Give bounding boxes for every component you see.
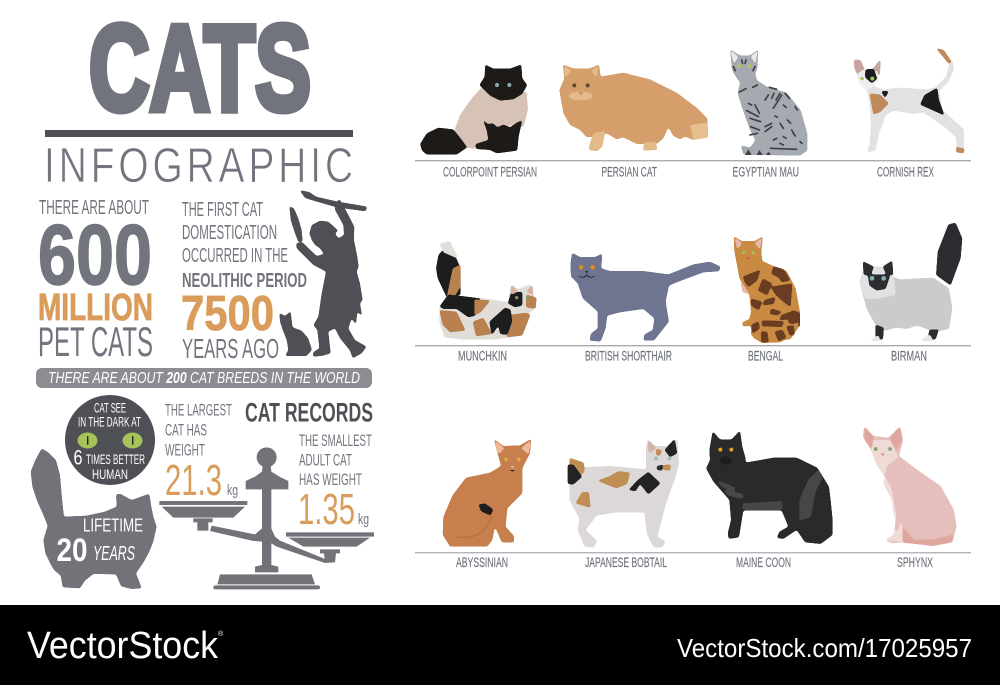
breed: british shorthair [570, 253, 721, 342]
text: row 1 labels: PERSIAN CAT [602, 164, 657, 180]
stat: first domestication: DOMESTICATION [182, 222, 277, 244]
text: row 3 labels: ABYSSINIAN [456, 555, 508, 570]
text: smallest cat: THE SMALLEST [299, 431, 372, 450]
footer bar [0, 605, 1000, 685]
text: row 1 labels: COLORPOINT PERSIAN [443, 164, 537, 180]
text: row 2 labels: BRITISH SHORTHAIR [585, 348, 672, 364]
text: smallest cat: ADULT CAT [299, 450, 352, 470]
breed: birman [859, 223, 962, 341]
text: row 2 labels: BENGAL [748, 348, 783, 364]
text: smallest cat: HAS WEIGHT [299, 470, 362, 489]
text: row 3 labels [456, 555, 933, 570]
breed: sphynx [863, 426, 957, 546]
heading: cat records: CAT RECORDS [245, 398, 373, 428]
stat: first domestication [181, 199, 307, 364]
icon: cat silhouette with lifetime [31, 448, 157, 589]
panel: breed row 2 [415, 223, 971, 346]
text: largest cat: kg [227, 482, 238, 499]
text: row 3 labels: MAINE COON [736, 555, 791, 570]
text: row 2 labels: BIRMAN [891, 348, 927, 364]
icon: caveman with small cat [279, 190, 367, 358]
text: largest cat: THE LARGEST [165, 400, 232, 420]
text: largest cat: WEIGHT [165, 440, 205, 460]
breed: cornish rex [854, 48, 965, 153]
breed: abyssinian [443, 439, 531, 547]
icon: cat silhouette with lifetime: YEARS [93, 543, 135, 565]
stat: 600 million pet cats [38, 197, 153, 365]
text: smallest cat: kg [358, 511, 369, 528]
icon: balance scale [159, 447, 374, 589]
text: smallest cat: 1.35 [298, 485, 355, 534]
stat: first domestication: THE FIRST CAT [182, 199, 263, 221]
panel: breed row 1 [415, 48, 971, 161]
stat: first domestication: NEOLITHIC PERIOD [182, 270, 307, 292]
subtitle: INFOGRAPHIC [44, 139, 357, 193]
text: row 2 labels [458, 348, 927, 364]
stat: 600 million pet cats: PET CATS [38, 318, 153, 365]
callout: cat night vision: TIMES BETTER [86, 452, 145, 467]
breed: munchkin [436, 241, 537, 340]
callout: cat night vision [65, 395, 155, 485]
text: smallest cat [298, 431, 372, 534]
breed: maine coon [706, 430, 833, 544]
text: row 1 labels [443, 164, 934, 180]
breed: colorpoint persian [420, 64, 528, 155]
stat: 600 million pet cats: 600 [38, 208, 152, 303]
callout: cat night vision: 6 [74, 446, 82, 470]
text: row 1 labels: CORNISH REX [877, 164, 934, 180]
text: largest cat [165, 400, 238, 505]
stat: first domestication: 7500 [181, 287, 274, 341]
footer bar: VectorStock.com/17025957 [677, 633, 972, 663]
breed: egyptian mau [730, 49, 807, 156]
text: row 1 labels: EGYPTIAN MAU [732, 164, 799, 180]
callout: cat night vision: HUMAN [92, 467, 128, 482]
callout: cat night vision: IN THE DARK AT [78, 414, 141, 430]
breed: persian cat [559, 64, 708, 151]
text: largest cat: CAT HAS [165, 420, 207, 440]
breed: japanese bobtail [568, 439, 679, 547]
text: row 3 labels: JAPANESE BOBTAIL [585, 555, 667, 570]
callout: cat night vision: CAT SEE [94, 400, 126, 416]
breed: bengal [734, 236, 800, 343]
text: largest cat: 21.3 [165, 456, 222, 505]
footer bar: VectorStock [27, 625, 219, 667]
icon: cat silhouette with lifetime: 20 [56, 532, 88, 568]
stat: first domestication: YEARS AGO [182, 333, 279, 364]
title: CATS [89, 0, 311, 136]
stat: first domestication: OCCURRED IN THE [182, 245, 288, 267]
stat: 600 million pet cats: MILLION [38, 287, 153, 329]
text: row 3 labels: SPHYNX [897, 555, 933, 570]
banner: 200 cat breeds: THERE ARE ABOUT 200 CAT BREEDS IN THE WORLD [48, 370, 360, 387]
footer bar: ® [218, 630, 224, 638]
text: row 2 labels: MUNCHKIN [458, 348, 507, 364]
stat: 600 million pet cats: THERE ARE ABOUT [39, 197, 149, 219]
icon: cat silhouette with lifetime: LIFETIME [83, 516, 143, 536]
panel: breed row 3 [415, 426, 971, 553]
